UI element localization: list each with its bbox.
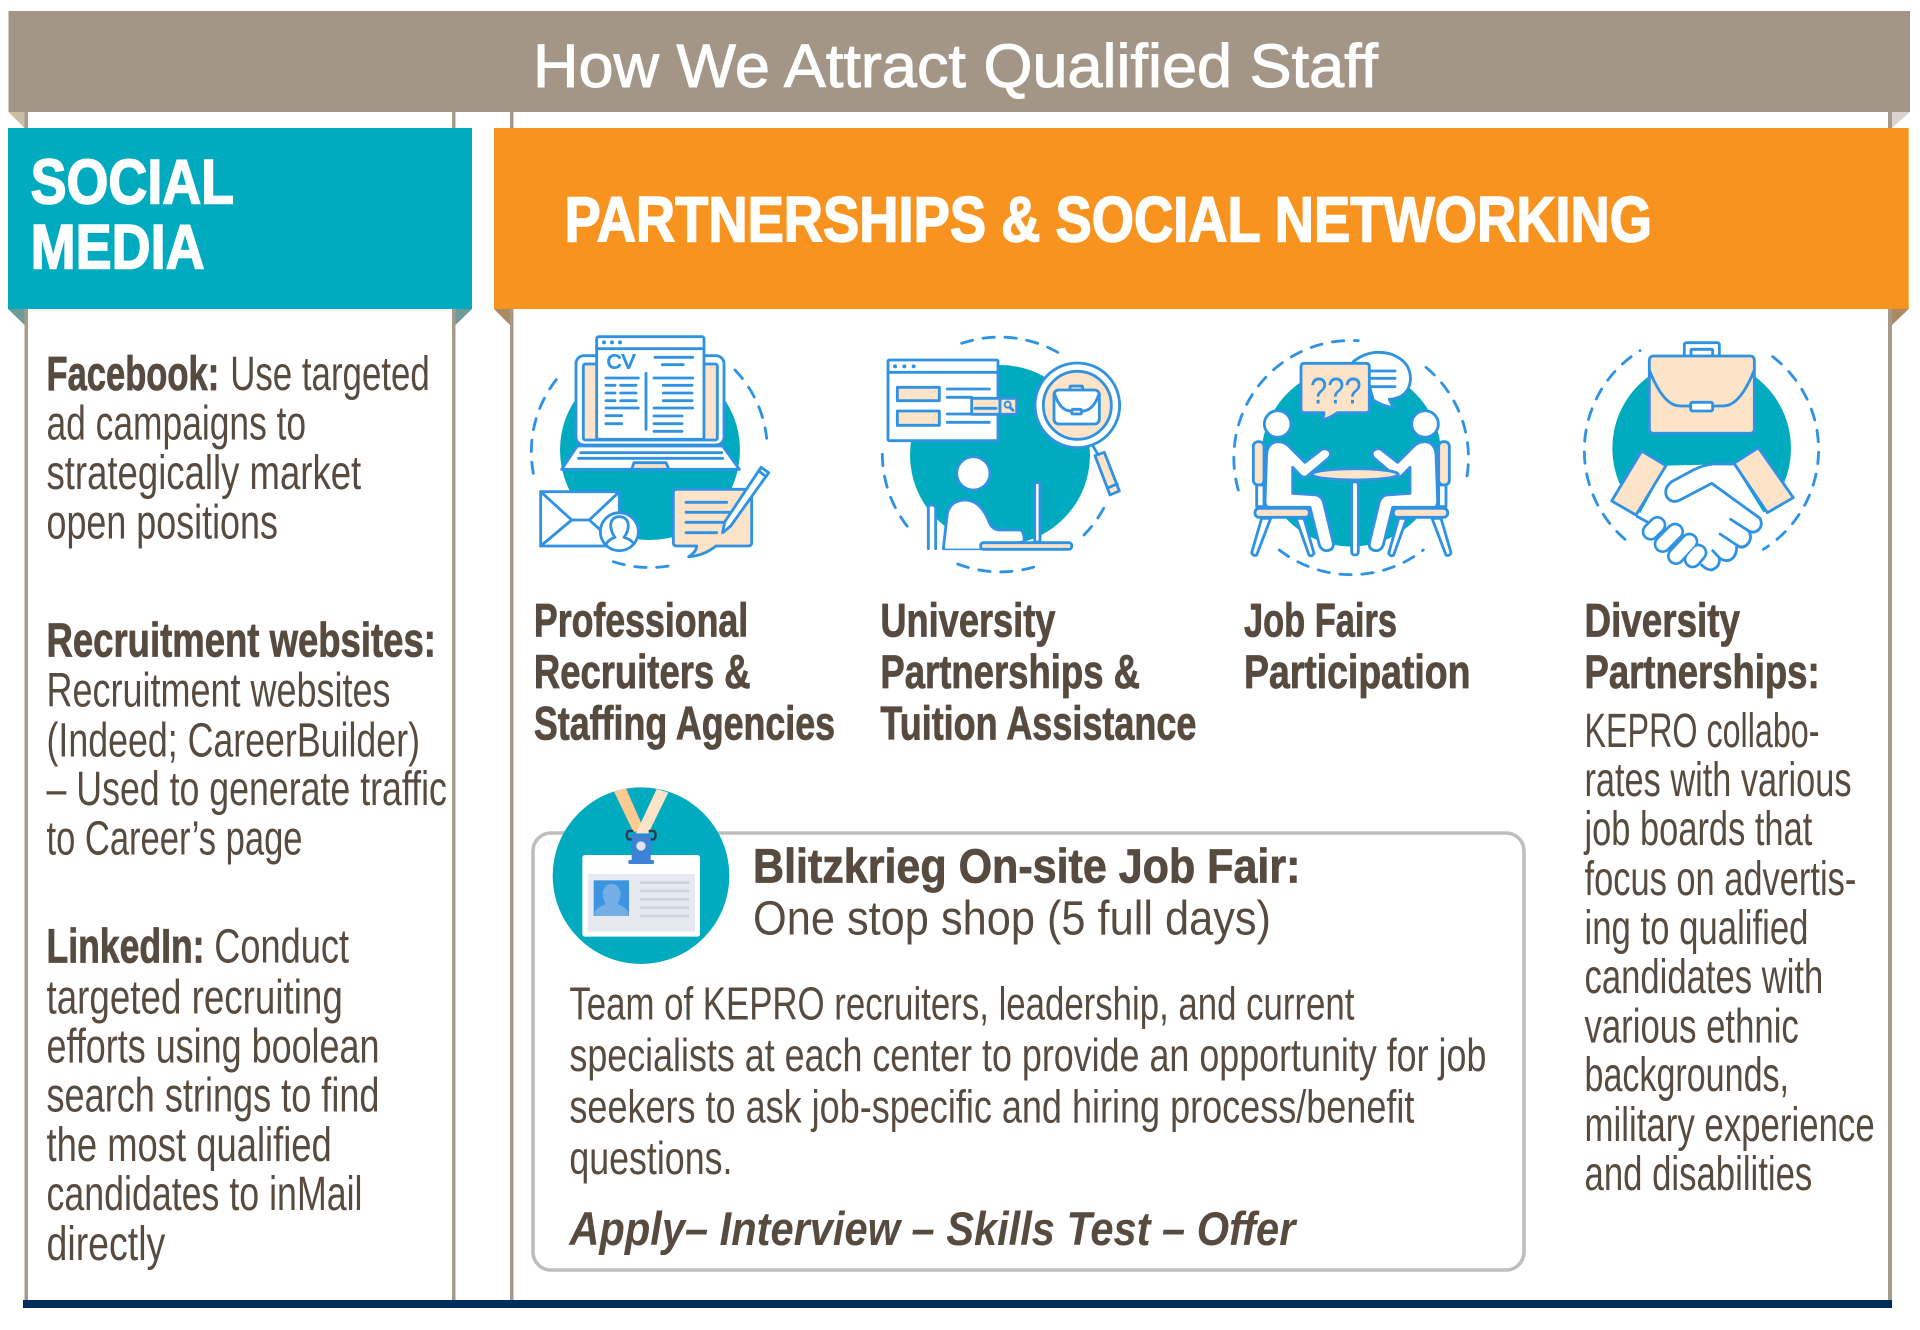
heading: social media: SOCIAL <box>31 148 234 218</box>
title: How We Attract Qualified Staff <box>533 32 1379 100</box>
callout process steps: Apply– Interview – Skills Test – Offer <box>569 1202 1298 1255</box>
callout: Blitzkrieg on-site job fair <box>533 787 1524 1270</box>
text block: Recruitment websites <box>46 614 447 866</box>
heading: university partnerships: University <box>880 594 1055 647</box>
text block: LinkedIn: efforts using boolean <box>46 1020 380 1073</box>
text block: LinkedIn: Conduct <box>214 920 349 974</box>
heading: professional recruiters: Professional <box>534 594 748 647</box>
text block: LinkedIn: directly <box>46 1218 165 1271</box>
text block: LinkedIn: targeted recruiting <box>46 971 343 1024</box>
callout body text: specialists at each center to provide an opportunity for job <box>569 1029 1486 1081</box>
heading: university partnerships: Partnerships & <box>880 645 1140 698</box>
heading: job fairs: Participation <box>1244 645 1470 698</box>
heading: diversity partnerships <box>1584 594 1820 698</box>
text block: Facebook: Use targeted <box>230 348 430 401</box>
heading: professional recruiters <box>534 594 835 750</box>
callout body text: Team of KEPRO recruiters, leadership, and current <box>569 978 1355 1030</box>
icon: job fair interview at table <box>1234 340 1468 575</box>
text block: Facebook: strategically market <box>46 447 361 500</box>
text block: LinkedIn <box>46 920 380 1271</box>
heading: social media <box>31 148 234 282</box>
text block: Recruitment websites: (Indeed; CareerBuilder) <box>46 715 420 768</box>
text block: Facebook <box>46 348 430 550</box>
heading: professional recruiters: Recruiters & <box>534 645 751 698</box>
callout body text <box>569 978 1486 1184</box>
text block: LinkedIn: LinkedIn: <box>46 920 204 974</box>
callout body text: questions. <box>569 1132 732 1184</box>
text block: diversity description: candidates with <box>1584 951 1823 1004</box>
heading: university partnerships <box>880 594 1196 750</box>
text block: LinkedIn: search strings to find <box>46 1070 380 1122</box>
text block: diversity description: various ethnic <box>1584 1000 1799 1054</box>
callout heading <box>753 840 1300 946</box>
heading: diversity partnerships: Diversity <box>1584 594 1740 647</box>
icon: briefcase and handshake <box>1584 343 1819 570</box>
heading: job fairs: Job Fairs <box>1244 594 1397 647</box>
callout heading: One stop shop (5 full days) <box>753 892 1271 946</box>
text block: Facebook: Facebook: <box>46 348 219 401</box>
heading: partnerships and social networking: PARTNERSHIPS & SOCIAL NETWORKING <box>564 184 1652 256</box>
icon: ID badge on lanyard <box>553 787 729 964</box>
callout heading: Blitzkrieg On-site Job Fair: <box>753 840 1300 894</box>
text block: Facebook: ad campaigns to <box>46 398 306 450</box>
icon: job fair interview at table: ??? <box>1310 370 1362 411</box>
text block: diversity description: backgrounds, <box>1584 1049 1789 1102</box>
icon: CV on laptop, envelope and note: CV <box>607 351 636 374</box>
heading: diversity partnerships: Partnerships: <box>1584 645 1820 698</box>
text block: diversity description: job boards that <box>1583 803 1812 856</box>
text block: Recruitment websites: Recruitment websites <box>46 664 390 718</box>
icon: university job search <box>882 337 1120 572</box>
text block: LinkedIn: candidates to inMail <box>46 1168 362 1221</box>
text block: diversity description: ing to qualified <box>1584 902 1808 955</box>
heading: university partnerships: Tuition Assistance <box>880 697 1196 750</box>
title banner <box>8 11 1910 112</box>
text block: Recruitment websites: to Career’s page <box>46 813 302 866</box>
heading: social media: MEDIA <box>31 212 205 282</box>
text block: Facebook: open positions <box>46 496 278 550</box>
panel: social media <box>8 128 472 1271</box>
text block: Recruitment websites: – Used to generate traffic <box>46 763 447 816</box>
panel: partnerships and social networking <box>494 128 1909 1270</box>
icon: CV on laptop, envelope and note <box>531 337 769 568</box>
heading: job fairs <box>1244 594 1470 698</box>
callout body text: seekers to ask job-specific and hiring process/benefit <box>569 1080 1415 1132</box>
text block: LinkedIn: the most qualified <box>46 1119 332 1172</box>
text block: diversity description <box>1583 705 1875 1201</box>
heading: professional recruiters: Staffing Agencies <box>534 697 835 750</box>
text block: Recruitment websites: Recruitment websites: <box>46 614 436 668</box>
text block: diversity description: and disabilities <box>1584 1148 1812 1201</box>
